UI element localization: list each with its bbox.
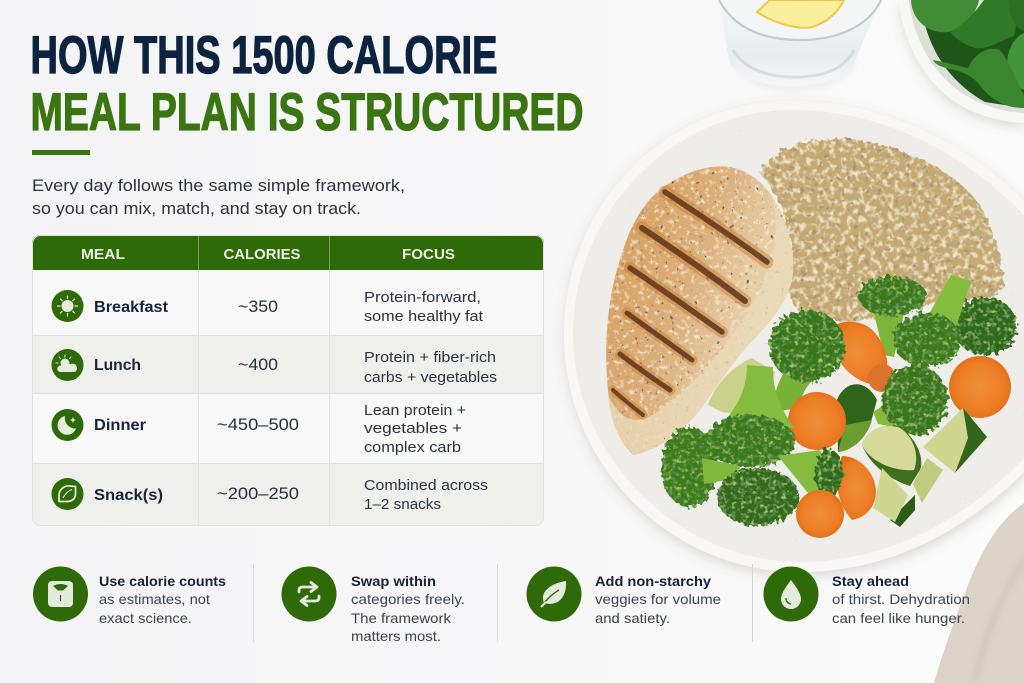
row: dinner: Dinner	[94, 417, 146, 434]
table header	[81, 247, 455, 263]
row: breakfast: Protein-forward,	[364, 290, 481, 306]
icon: sun	[52, 290, 84, 322]
intro text	[32, 176, 405, 218]
row: lunch	[52, 349, 497, 386]
divider	[497, 564, 498, 642]
row: breakfast: ~350	[238, 298, 278, 316]
tip: hydration: Stay ahead	[832, 573, 909, 589]
icon: scale	[33, 566, 88, 622]
icon: water drop	[764, 566, 818, 622]
title: MEAL PLAN IS STRUCTURED	[30, 83, 584, 142]
napkin	[934, 503, 1024, 683]
table header: CALORIES	[224, 247, 301, 263]
tip: calorie counts: Use calorie counts	[99, 573, 226, 589]
row: snacks: Snack(s)	[94, 487, 163, 504]
tip: swap: Swap within	[351, 573, 436, 589]
spinach leaves	[911, 0, 1024, 108]
broccoli right dark	[953, 297, 1017, 355]
carrot top	[827, 322, 887, 385]
title	[30, 26, 584, 142]
zucchini round	[862, 426, 921, 486]
tip: veggies: and satiety.	[595, 610, 670, 626]
row: dinner: complex carb	[364, 440, 461, 456]
row: lunch: ~400	[238, 356, 278, 374]
carrot center	[788, 392, 846, 450]
broccoli top right	[858, 276, 926, 357]
icon: leaf	[526, 566, 582, 622]
carrot bottom	[796, 490, 844, 538]
meal table	[32, 235, 544, 526]
broccoli left	[661, 427, 740, 507]
table header: FOCUS	[402, 247, 455, 263]
icon: sun and cloud	[52, 349, 84, 381]
tip: calorie counts: exact science.	[99, 610, 192, 626]
carrot small	[868, 364, 896, 392]
zucchini back	[708, 358, 775, 418]
grilled chicken	[606, 166, 793, 455]
tip: hydration: of thirst. Dehydration	[832, 591, 970, 607]
row: lunch: Lunch	[94, 357, 141, 374]
broccoli small stem	[778, 449, 843, 498]
quinoa	[759, 139, 1003, 321]
row: breakfast: some healthy fat	[364, 309, 483, 325]
tip: hydration: can feel like hunger.	[832, 610, 965, 626]
row: dinner: ~450–500	[217, 416, 299, 434]
tip: hydration	[764, 566, 970, 626]
table header: MEAL	[81, 247, 125, 263]
intro text: Every day follows the same simple framework,	[32, 176, 405, 195]
row: lunch: carbs + vegetables	[364, 370, 497, 386]
row: lunch: Protein + fiber-rich	[364, 350, 496, 366]
tip: swap: categories freely.	[351, 591, 465, 607]
row: dinner	[52, 403, 466, 456]
divider	[752, 564, 753, 642]
broccoli bottom	[717, 468, 799, 526]
tip: swap: The framework	[351, 610, 452, 626]
lemon wedge	[757, 0, 844, 28]
row: snacks: ~200–250	[217, 485, 299, 503]
tip: veggies: veggies for volume	[595, 591, 721, 607]
tip: calorie counts: as estimates, not	[99, 591, 210, 607]
row: breakfast: Breakfast	[94, 299, 168, 316]
tip: calorie counts	[33, 566, 226, 626]
icon: moon	[52, 409, 84, 441]
icon: swap arrows	[282, 566, 336, 622]
title: HOW THIS 1500 CALORIE	[30, 26, 498, 85]
row: snacks	[52, 478, 488, 513]
zucchini chunk bottom	[873, 468, 915, 527]
zucchini chunk lower	[913, 458, 943, 503]
row: snacks: 1–2 snacks	[364, 497, 441, 513]
tip: veggies: Add non-starchy	[595, 573, 711, 589]
plate meal illustration	[564, 101, 1024, 572]
tip: swap: matters most.	[351, 628, 441, 644]
zucchini dark piece	[837, 384, 877, 452]
zucchini chunk right	[923, 408, 987, 473]
grill marks	[613, 192, 767, 415]
broccoli center	[769, 310, 845, 412]
table rows	[32, 235, 544, 526]
carrot half bottom	[837, 456, 876, 520]
grill glow	[613, 192, 767, 415]
row: dinner: Lean protein +	[364, 403, 466, 419]
water glass with lemon	[719, 0, 881, 92]
divider	[253, 564, 254, 642]
carrot right	[949, 356, 1011, 418]
tip: swap	[282, 566, 465, 644]
row: dinner: vegetables +	[364, 421, 462, 437]
broccoli bottom center	[705, 365, 795, 467]
row: breakfast	[52, 290, 483, 325]
title accent bar	[32, 150, 90, 155]
icon: snack	[52, 478, 84, 510]
tip: veggies	[526, 566, 721, 626]
broccoli mid right	[873, 365, 948, 435]
plate	[564, 101, 1024, 572]
intro text: so you can mix, match, and stay on track.	[32, 199, 361, 218]
row: snacks: Combined across	[364, 478, 488, 494]
spinach bowl	[899, 0, 1024, 123]
broccoli large with stem	[893, 275, 971, 367]
